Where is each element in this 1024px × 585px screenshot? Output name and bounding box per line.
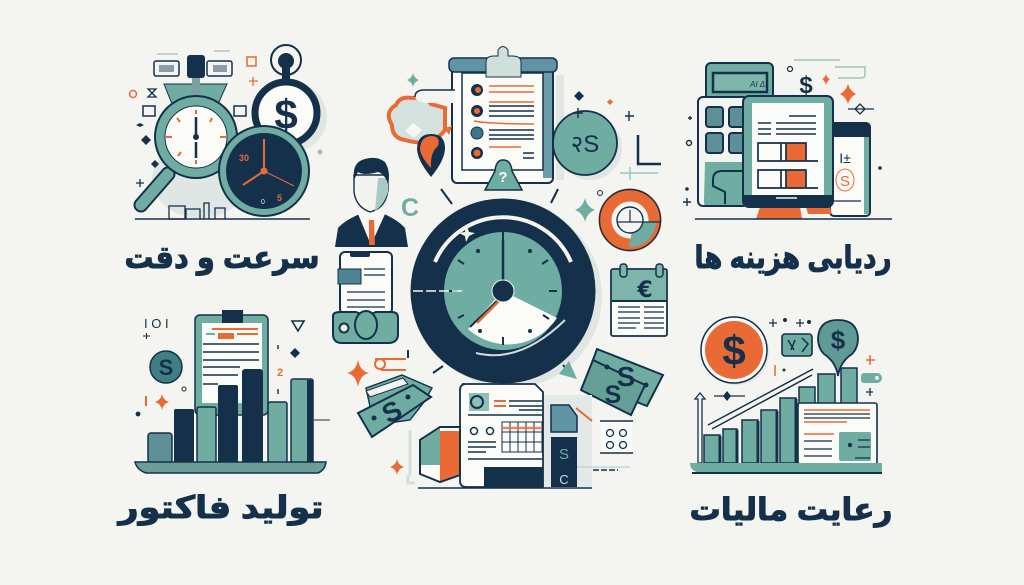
icon: tablet device xyxy=(830,123,870,216)
icon: corner marker xyxy=(638,135,661,164)
icon: monitor with report xyxy=(743,96,833,219)
icon: tablet device: I± xyxy=(839,150,851,166)
icon: binder tower: S xyxy=(559,446,569,463)
icon: cash stack right: S xyxy=(617,361,635,392)
panel: invoice generation xyxy=(116,310,330,526)
baseline xyxy=(135,218,310,220)
heading: tax compliance: رعایت مالیات xyxy=(690,492,892,528)
icon: cash stack right xyxy=(581,349,663,415)
icon: location pin xyxy=(818,320,858,376)
icon: donut chart xyxy=(600,190,660,250)
small decorations: 2 xyxy=(277,367,283,379)
icon: dollar coin: $ xyxy=(722,327,746,374)
panel: central time and billing cluster xyxy=(333,46,667,488)
bar chart xyxy=(148,369,313,463)
bar chart xyxy=(704,368,857,463)
small decorations xyxy=(130,51,322,219)
icon: phone in wallet xyxy=(333,251,398,343)
icon: cash stack right: S xyxy=(605,381,621,409)
icon: shield xyxy=(420,427,460,482)
icon: checklist clipboard: ? xyxy=(498,169,508,186)
baseline xyxy=(418,487,592,489)
small decorations xyxy=(714,318,882,401)
heading: invoice generation: تولید فاکتور xyxy=(116,490,324,526)
icon: dollar stopwatch: $ xyxy=(274,91,298,138)
icon: up arrow xyxy=(695,393,705,463)
small decorations xyxy=(136,316,330,420)
icon: dark clock xyxy=(218,125,310,217)
icon: dark clock: 30 xyxy=(239,153,249,163)
icon: clipboard xyxy=(195,310,268,415)
base line xyxy=(692,472,882,474)
chart base xyxy=(690,463,882,472)
icon: dollar stopwatch xyxy=(255,45,327,152)
icon: tablet device: S xyxy=(840,173,850,190)
panel: expense tracking xyxy=(683,60,892,276)
icon: dark clock: 0 xyxy=(261,199,265,206)
icon: teal letter C: C xyxy=(401,194,419,222)
icon: cash stack left: S xyxy=(377,395,407,429)
icon: businessman xyxy=(335,158,408,247)
icon: dark clock: 5 xyxy=(277,193,282,203)
icon: calendar: € xyxy=(636,278,653,303)
icon: location pin: $ xyxy=(831,325,846,355)
heading: expense tracking: ردیابی هزینه ها xyxy=(694,240,892,276)
icon: calculator xyxy=(698,63,773,206)
icon: dollar coin xyxy=(701,317,769,385)
icon: teal coin: २S xyxy=(571,131,599,158)
icon: binder tower: C xyxy=(559,472,569,487)
baseline xyxy=(695,218,892,220)
icon: cash stack left xyxy=(358,375,432,437)
small decorations xyxy=(683,60,882,206)
central decorations xyxy=(347,73,658,483)
icon: large clock xyxy=(408,198,602,388)
panel: speed and accuracy xyxy=(124,45,327,276)
icon: binder tower xyxy=(551,405,577,487)
icon: checklist clipboard xyxy=(449,46,564,190)
icon: dice box xyxy=(600,421,633,453)
panel: tax compliance xyxy=(690,317,892,528)
icon: calendar xyxy=(611,264,667,336)
icon: report sheet xyxy=(798,403,877,464)
icon: trend arrow xyxy=(708,369,813,429)
icon: cloud and location pin xyxy=(389,90,455,177)
icon: dollar coin: S xyxy=(159,355,173,380)
heading: speed and accuracy: سرعت و دقت xyxy=(124,240,320,276)
icon: teal coin xyxy=(553,111,622,180)
icon: magnifier clock xyxy=(141,55,248,218)
icon: banknote badge xyxy=(782,334,812,356)
small decorations: $ xyxy=(799,72,813,99)
chart base xyxy=(135,462,326,473)
icon: dollar coin xyxy=(150,351,182,383)
icon: invoice document xyxy=(460,384,592,487)
small decorations: I O I xyxy=(144,316,169,331)
icon: calculator: AI Δ xyxy=(749,80,765,89)
